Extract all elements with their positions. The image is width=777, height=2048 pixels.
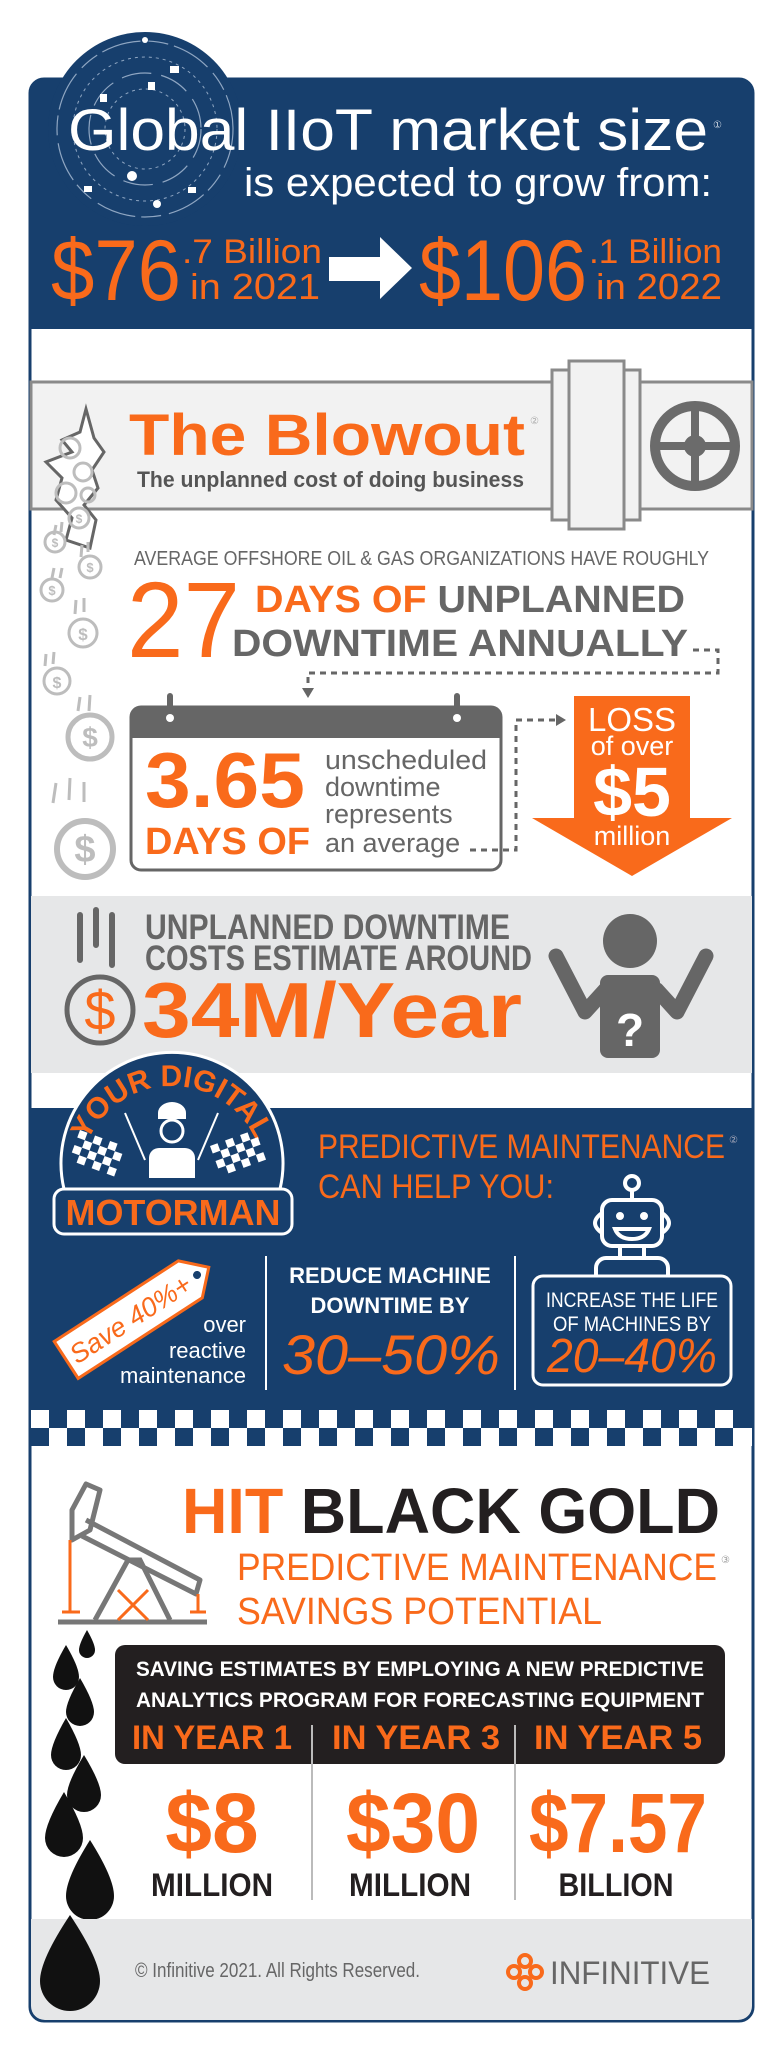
stat: 2021 value: in 2021	[190, 266, 320, 307]
icon: dollar coin: $	[84, 979, 116, 1042]
tag: save 40%: Save 40%+	[64, 1269, 197, 1370]
icon: falling coins: $	[82, 722, 98, 753]
heading: hit black gold: HIT BLACK GOLD	[182, 1475, 720, 1547]
header panel: ①	[713, 120, 722, 131]
icon: falling coins: $	[48, 583, 56, 598]
stat: 2022 value: in 2022	[596, 266, 722, 307]
badge: your digital motorman: MOTORMAN	[66, 1192, 280, 1233]
stat: year 1: MILLION	[151, 1867, 273, 1903]
panel: saving estimates: ANALYTICS PROGRAM FOR FORECASTING EQUIPMENT	[136, 1689, 704, 1712]
subheading: savings potential: SAVINGS POTENTIAL	[237, 1591, 602, 1633]
calendar panel: downtime	[325, 772, 441, 802]
stat: 2022 value: .1 Billion	[589, 233, 722, 271]
stat: year 5: $7.57	[529, 1776, 707, 1870]
stat: 2021 value	[51, 223, 322, 319]
callout: loss of over $5 million: million	[594, 821, 670, 851]
title: Global IIoT market size	[68, 98, 708, 163]
stat: reduce downtime: 30–50%	[282, 1323, 500, 1386]
icon: IoT globe circle	[48, 32, 242, 226]
stat: year 3: $30	[346, 1776, 480, 1870]
stat: increase life: INCREASE THE LIFE	[546, 1289, 718, 1312]
stat: 34M/Year: 34M/Year	[142, 966, 522, 1054]
panel: unplanned downtime cost: COSTS ESTIMATE AROUND	[145, 939, 532, 978]
calendar panel: unscheduled	[325, 745, 487, 775]
stat: 2022 value	[419, 223, 722, 319]
heading: The Blowout: The Blowout	[129, 403, 525, 468]
stat: increase life	[533, 1276, 731, 1385]
stat: reduce downtime: DOWNTIME BY	[311, 1293, 470, 1318]
tag: save 40%	[54, 1249, 221, 1378]
stat: 27 days: 27	[127, 559, 240, 680]
icon: falling coins: $	[76, 512, 83, 526]
calendar panel: 3.65	[145, 736, 305, 824]
arrow: growth	[329, 237, 412, 299]
stat: reduce downtime	[282, 1263, 500, 1386]
text: over reactive maintenance	[120, 1312, 246, 1388]
callout: loss of over $5 million: of over	[591, 731, 673, 761]
panel: saving estimates: SAVING ESTIMATES BY EMPLOYING A NEW PREDICTIVE	[136, 1658, 704, 1681]
stat: increase life: 20–40%	[546, 1330, 717, 1383]
stat: year 3: IN YEAR 3	[332, 1719, 500, 1757]
callout: loss of over $5 million	[532, 696, 732, 876]
panel: predictive maintenance (blue)	[32, 1051, 752, 1410]
heading: predictive maintenance can help	[318, 1128, 738, 1206]
icon: valve wheel	[655, 406, 735, 486]
icon: pipe flange	[552, 361, 640, 529]
subheading: savings potential	[237, 1547, 730, 1633]
stat: reduce downtime: REDUCE MACHINE	[289, 1263, 491, 1288]
badge: your digital motorman: YOUR DIGITAL	[70, 1065, 269, 1139]
panel: unplanned downtime cost: UNPLANNED DOWNTIME	[145, 908, 510, 947]
icon: confused person	[556, 914, 706, 1058]
stat: year 5: BILLION	[558, 1867, 674, 1903]
stat: year 1	[132, 1719, 292, 1903]
stat: year 3	[332, 1719, 500, 1903]
stat: 27 days: DAYS OF UNPLANNED	[255, 579, 685, 621]
calendar panel: DAYS OF	[145, 821, 310, 863]
icon: falling coins: $	[78, 625, 88, 644]
callout: loss of over $5 million: LOSS	[588, 701, 676, 738]
text: over reactive maintenance: reactive	[169, 1338, 246, 1363]
stat: 27 days: DOWNTIME ANNUALLY	[232, 623, 688, 665]
checkered band	[31, 1410, 752, 1446]
icon: falling coins	[41, 438, 113, 877]
icon: robot	[595, 1176, 669, 1276]
icon: falling coins: $	[74, 829, 96, 871]
footer	[31, 1915, 752, 2020]
subtitle: is expected to grow from:	[244, 161, 712, 205]
icon: falling coins: $	[86, 560, 94, 575]
subheading: savings potential: PREDICTIVE MAINTENANCE	[237, 1547, 717, 1589]
icon: falling coins: $	[52, 536, 59, 550]
stat: year 5	[529, 1719, 707, 1903]
text: over reactive maintenance: maintenance	[120, 1363, 246, 1388]
header panel	[29, 32, 754, 329]
panel: blowout pipe band	[31, 361, 752, 548]
calendar panel	[131, 693, 501, 870]
icon: broken wall	[46, 409, 104, 548]
text: over reactive maintenance: over	[203, 1312, 246, 1337]
icon: pumpjack	[58, 1484, 207, 1622]
callout: loss of over $5 million: $5	[593, 753, 671, 831]
arrow: dashed connector	[308, 650, 718, 690]
stat: year 1: $8	[165, 1776, 259, 1870]
logo: infinitive: INFINITIVE	[550, 1955, 710, 1991]
icon: confused person: ?	[616, 1004, 644, 1056]
subheading: The unplanned cost of doing business	[137, 467, 524, 492]
stat: 2021 value: $76	[51, 223, 181, 319]
arrow: dashed to loss	[470, 720, 555, 850]
stat: year 1: IN YEAR 1	[132, 1719, 292, 1757]
panel: unplanned downtime cost	[31, 896, 752, 1073]
icon: dollar coin	[67, 910, 133, 1043]
panel: blowout pipe band: ②	[530, 416, 539, 427]
panel: saving estimates	[115, 1645, 725, 1903]
stat: 2021 value: .7 Billion	[182, 233, 322, 271]
stat: 27 days	[127, 559, 688, 680]
calendar panel: represents	[325, 799, 453, 829]
icon: oil drops	[45, 1630, 114, 1920]
footer: © Infinitive 2021. All Rights Reserved.	[135, 1960, 420, 1982]
icon: falling coins: $	[53, 675, 62, 692]
subheading: savings potential: ③	[721, 1555, 730, 1566]
stat: year 3: MILLION	[349, 1867, 471, 1903]
stat: year 5: IN YEAR 5	[534, 1719, 702, 1757]
text: average offshore: AVERAGE OFFSHORE OIL & GAS ORGANIZATIONS HAVE ROUGHLY	[134, 548, 709, 570]
icon: mechanic	[149, 1102, 195, 1178]
heading: predictive maintenance can help: PREDICTIVE MAINTENANCE	[318, 1128, 725, 1166]
calendar panel: an average	[325, 828, 460, 858]
heading: predictive maintenance can help: CAN HELP YOU:	[318, 1168, 554, 1206]
stat: 2022 value: $106	[419, 223, 587, 319]
badge: your digital motorman	[52, 1051, 294, 1236]
icon: checkered flags	[69, 1113, 266, 1176]
heading: predictive maintenance can help: ②	[729, 1135, 738, 1146]
stat: increase life: OF MACHINES BY	[553, 1313, 711, 1336]
